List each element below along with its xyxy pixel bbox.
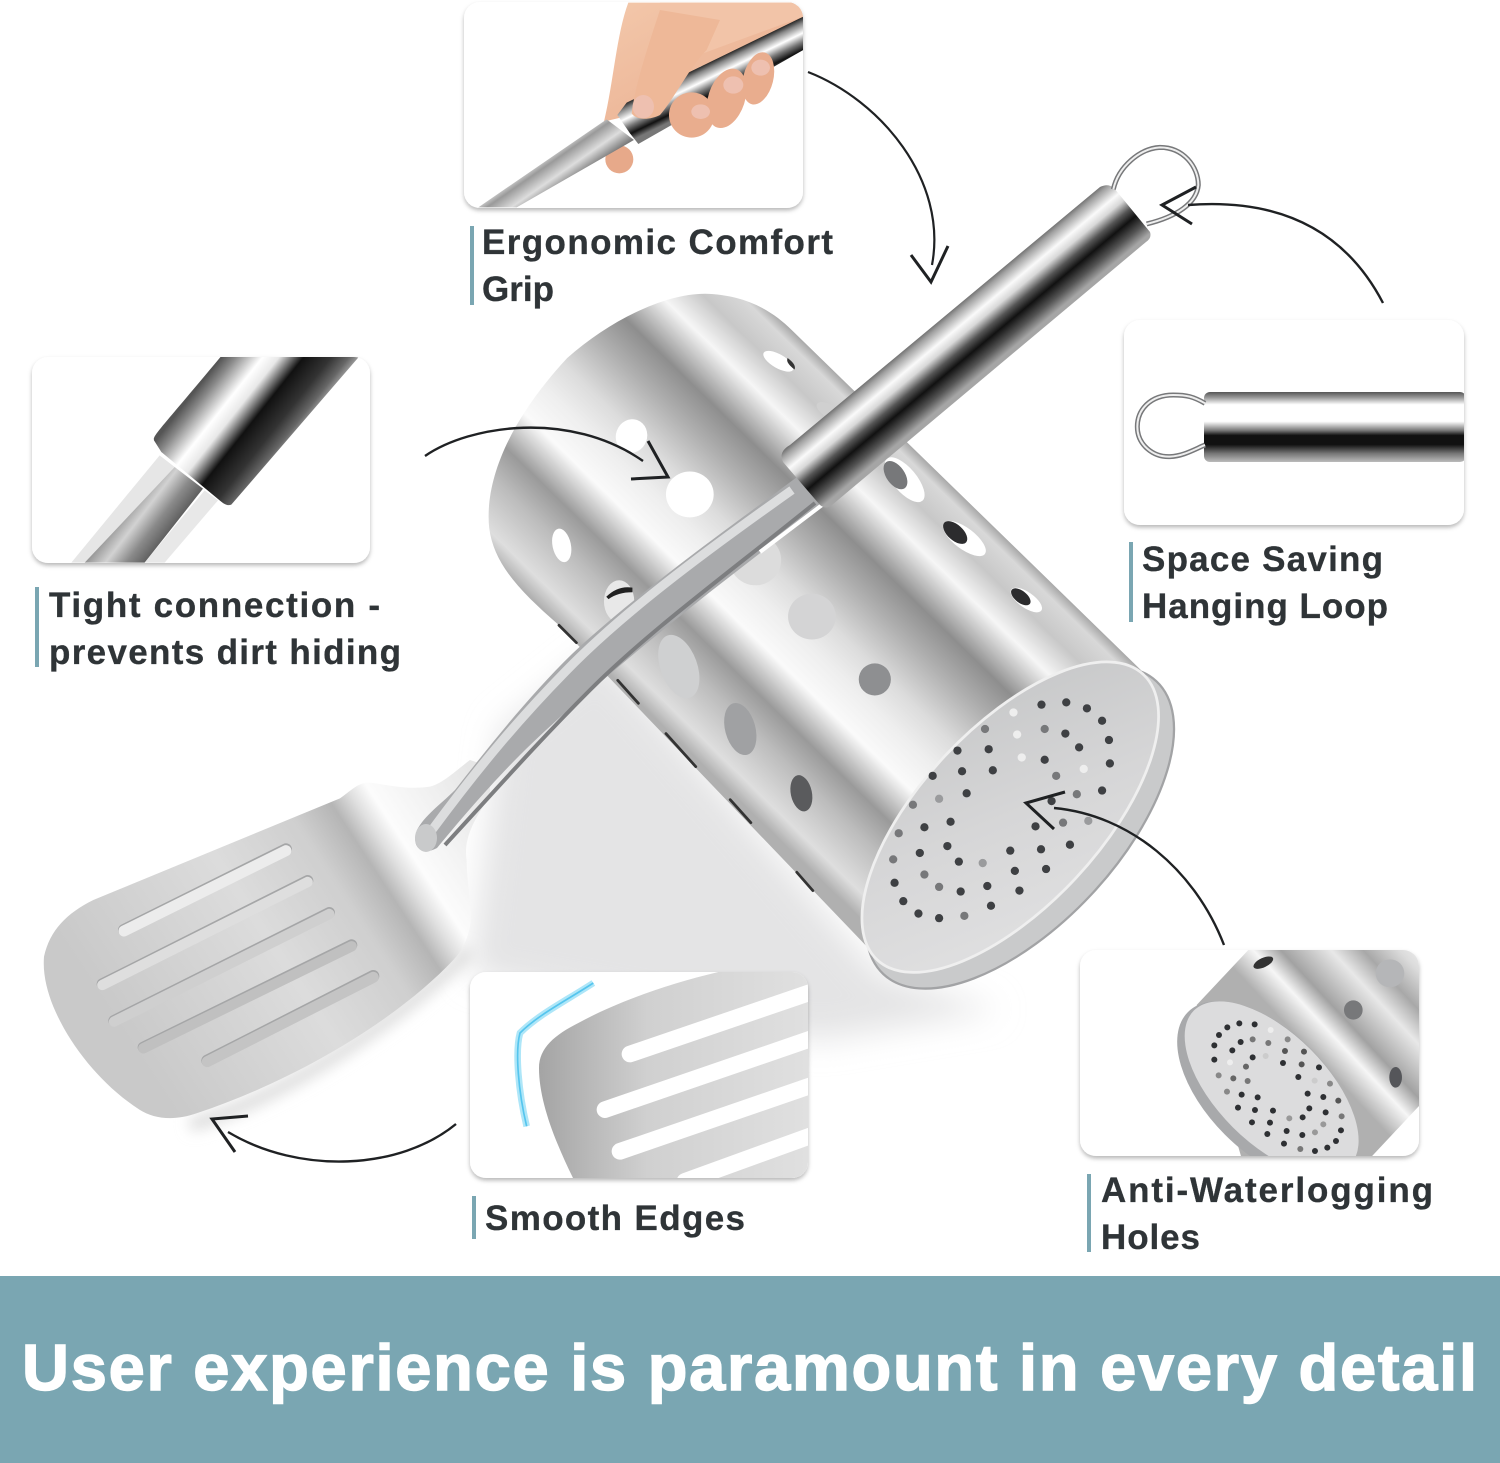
icon: sleeve [154,356,360,505]
panel: drain holes [1078,950,1422,1161]
arrow: drain holes [1026,792,1224,945]
icon: mini perforations [1211,1020,1345,1154]
icon: back of hand over handle [660,2,803,52]
icon: blue highlight [518,983,593,1126]
panel: tight connection [32,356,370,563]
hanging loop [1113,147,1198,224]
caption: smooth edges: Smooth Edges [485,1199,745,1238]
icon: horizontal handle [1204,392,1466,462]
icon: tong rod [478,119,634,207]
panel: ergonomic grip [464,2,807,208]
spatula slots [102,849,373,1062]
caption: hanging loop [1129,540,1388,626]
spatula shaft [415,477,822,852]
caption: drain holes [1087,1171,1433,1257]
base rim of cylinder [812,615,1228,1041]
icon: slots [605,990,818,1181]
caption: drain holes: Holes [1101,1218,1200,1257]
caption: hanging loop: Space Saving [1142,540,1383,579]
caption: hanging loop: Hanging Loop [1142,587,1388,626]
icon: hand back [604,3,807,122]
arrow: loop [1162,187,1383,303]
icon: loop [1137,395,1205,457]
arrow: grip to handle [808,72,948,282]
icon: mini plate [1184,1001,1359,1156]
panel: hanging loop [1124,320,1466,525]
banner headline: User experience is paramount in every detail [22,1331,1477,1404]
caption: ergonomic grip: Grip [482,270,554,309]
icon: lower finger [605,145,633,173]
caption: ergonomic grip [470,223,833,309]
floor shadow [470,650,1000,1040]
caption: tight connection: Tight connection - [49,586,380,625]
base plate [812,613,1209,1021]
bottom edge hole slivers [559,625,813,891]
icon: mini side holes [1252,954,1404,1088]
product: perforated cylinder holder [489,294,1228,1041]
icon: fingers [669,49,779,138]
icon: side holes [549,347,1046,813]
arrow: connection [425,428,668,479]
icon: drain perforations [889,698,1114,922]
icon: handle in hand [617,17,803,144]
metal handle [782,185,1150,508]
caption: drain holes: Anti-Waterlogging [1101,1171,1433,1210]
caption: ergonomic grip: Ergonomic Comfort [482,223,833,262]
icon: mini rim [1177,1006,1326,1147]
icon: mini cylinder [1197,950,1420,1158]
arrow: edges [212,1116,456,1162]
icon: blade corner [539,972,809,1179]
shadow under spatula [190,950,470,1125]
panel: smooth edges [470,972,818,1181]
icon: thumb [632,10,720,119]
icon: rod end [71,455,218,563]
banner [0,1276,1500,1463]
spatula blade [44,760,490,1118]
product: spatula [44,147,1198,1118]
caption: tight connection: prevents dirt hiding [49,633,401,672]
icon: nails [633,60,770,119]
caption: tight connection [35,586,401,672]
